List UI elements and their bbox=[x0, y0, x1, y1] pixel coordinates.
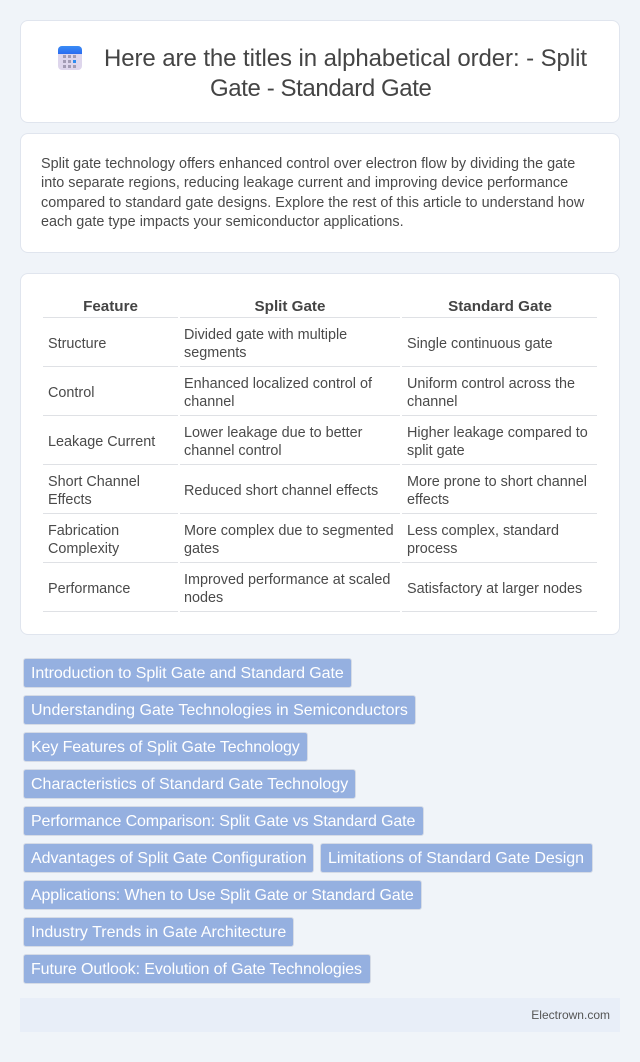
header: Feature: Feature bbox=[83, 298, 138, 315]
footer text: Electrown.com bbox=[531, 1008, 610, 1022]
header: Standard Gate: Standard Gate bbox=[448, 298, 552, 315]
tag: Understanding bbox=[23, 695, 416, 725]
tag: Introduction bbox=[23, 658, 352, 688]
title: Gate - Standard Gate bbox=[210, 75, 431, 102]
panel: comparison table: Lower leakage due to better bbox=[184, 425, 362, 441]
title: Here are the titles in alphabetical order: - Split bbox=[104, 45, 587, 72]
panel: comparison table: Divided gate with multiple bbox=[184, 327, 347, 343]
row: Fabrication Complexity: Fabrication bbox=[48, 523, 119, 539]
panel: comparison table: Improved performance at scaled bbox=[184, 572, 390, 588]
tag: Characteristics bbox=[23, 769, 356, 799]
panel: comparison table: gates bbox=[184, 541, 219, 557]
intro text: each gate type impacts your semiconductor applications. bbox=[41, 214, 404, 230]
row: Short Channel Effects bbox=[48, 474, 140, 508]
intro text: Split gate technology offers enhanced control over electron flow by dividing the gate bbox=[41, 156, 575, 172]
panel: comparison table: effects bbox=[407, 492, 449, 508]
panel: comparison table: More prone to short channel bbox=[407, 474, 587, 490]
row: Leakage Current: Leakage Current bbox=[48, 434, 155, 450]
panel: comparison table: Enhanced localized control of bbox=[184, 376, 372, 392]
panel: comparison table: nodes bbox=[184, 590, 223, 606]
row: Structure: Structure bbox=[48, 336, 106, 352]
tag: Key Features bbox=[23, 732, 308, 762]
panel: comparison table: channel control bbox=[184, 443, 282, 459]
icon: calendar bbox=[58, 46, 82, 70]
tag: Industry Trends: Industry Trends in Gate Architecture bbox=[31, 924, 286, 941]
title bbox=[104, 45, 587, 102]
panel: title card bbox=[20, 20, 620, 123]
panel: comparison table: Single continuous gate bbox=[407, 336, 553, 352]
tag: Applications: Applications: When to Use Split Gate or Standard Gate bbox=[31, 887, 414, 904]
tag: Advantages: Advantages of Split Gate Configuration bbox=[31, 850, 306, 867]
panel: comparison table: More complex due to segmented bbox=[184, 523, 394, 539]
intro text: into separate regions, reducing leakage current and improving device performance bbox=[41, 175, 568, 191]
panel: comparison table: process bbox=[407, 541, 457, 557]
row: Fabrication Complexity bbox=[48, 523, 120, 557]
panel: comparison table: channel bbox=[184, 394, 234, 410]
tag: Applications bbox=[23, 880, 422, 910]
footer bar bbox=[20, 998, 620, 1032]
panel: comparison table: Less complex, standard bbox=[407, 523, 559, 539]
row: Short Channel Effects: Effects bbox=[48, 492, 92, 508]
panel: comparison table: Satisfactory at larger nodes bbox=[407, 581, 582, 597]
row: Fabrication Complexity: Complexity bbox=[48, 541, 119, 557]
tag: Limitations: Limitations of Standard Gate Design bbox=[328, 850, 584, 867]
row: Short Channel Effects: Short Channel bbox=[48, 474, 140, 490]
panel: comparison table: Uniform control across the bbox=[407, 376, 575, 392]
tag: Future Outlook: Future Outlook: Evolution of Gate Technologies bbox=[31, 961, 362, 978]
intro text: compared to standard gate designs. Explore the rest of this article to understand how bbox=[41, 194, 584, 210]
panel: comparison table: segments bbox=[184, 345, 246, 361]
intro text bbox=[41, 156, 584, 230]
panel: comparison table: Reduced short channel effects bbox=[184, 483, 378, 499]
panel: comparison table bbox=[20, 273, 620, 635]
panel: intro card bbox=[20, 133, 620, 253]
tag: Key Features: Key Features of Split Gate Technology bbox=[31, 739, 300, 756]
row: Performance: Performance bbox=[48, 581, 130, 597]
tag: Limitations bbox=[320, 843, 593, 873]
tag: Performance Comparison bbox=[23, 806, 424, 836]
tag: Understanding: Understanding Gate Technologies in Semiconductors bbox=[31, 702, 408, 719]
panel: comparison table: channel bbox=[407, 394, 457, 410]
tag: Advantages bbox=[23, 843, 314, 873]
panel: comparison table: split gate bbox=[407, 443, 465, 459]
tag: Future Outlook bbox=[23, 954, 371, 984]
tag: Introduction: Introduction to Split Gate and Standard Gate bbox=[31, 665, 344, 682]
tag: Performance Comparison: Performance Comparison: Split Gate vs Standard Gate bbox=[31, 813, 415, 830]
tag: Industry Trends bbox=[23, 917, 294, 947]
panel: comparison table: Higher leakage compared to bbox=[407, 425, 588, 441]
tag: Characteristics: Characteristics of Standard Gate Technology bbox=[31, 776, 348, 793]
row: Control: Control bbox=[48, 385, 94, 401]
header: Split Gate: Split Gate bbox=[255, 298, 325, 315]
